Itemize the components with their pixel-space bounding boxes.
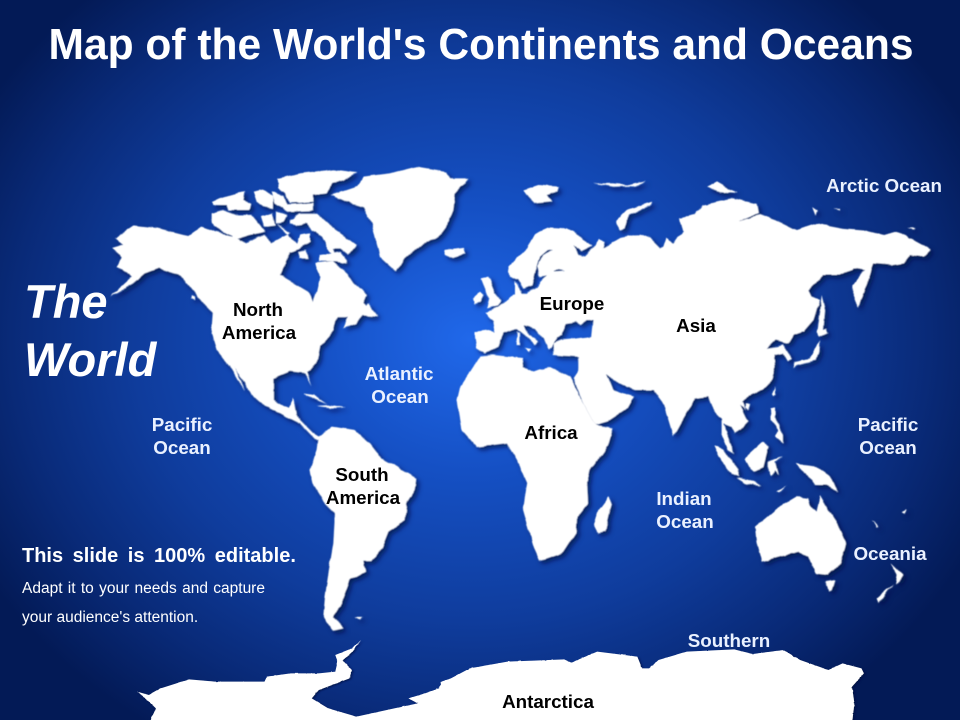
label: Atlantic Ocean: Atlantic [365,363,433,384]
landmass: Europe [473,227,630,353]
label: Pacific Ocean left: Ocean [153,437,211,458]
landmass: Oceania [755,495,907,603]
label: Pacific Ocean right: Pacific [858,414,918,435]
world map landmasses [110,167,930,631]
label: The World: The [24,275,108,328]
text block: editable note: Adapt it to your needs and capture [22,580,265,597]
label: Indian Ocean: Ocean [656,511,714,532]
label: South America [326,464,401,508]
label: Pacific Ocean right: Ocean [859,437,917,458]
label: The World [24,275,158,386]
label: The World: World [24,333,158,386]
label: Oceania: Oceania [853,543,927,564]
landmass: Africa and Madagascar [457,355,613,561]
landmass: Asia [523,181,930,453]
label: North America [222,299,297,343]
label: Pacific Ocean right [858,414,918,458]
label: Antarctica: Antarctica [502,691,594,712]
label: Arctic Ocean: Arctic Ocean [826,175,942,196]
landmass: Antarctica [137,640,864,720]
label: Africa: Africa [524,422,578,443]
text block: editable note: This slide is 100% editable. [22,545,296,567]
landmass: South America [310,427,417,631]
label: Indian Ocean: Indian [656,488,712,509]
text block: editable note [22,545,296,626]
label: Pacific Ocean left: Pacific [152,414,212,435]
label: South America: South [335,464,389,485]
label: North America: North [233,299,283,320]
label: North America: America [222,322,297,343]
title: Map of the World's Continents and Oceans [48,20,914,69]
label: Atlantic Ocean: Ocean [371,386,429,407]
label: Indian Ocean [656,488,714,532]
landmass: Greenland and Iceland [332,167,468,272]
landmass: Japan and Southeast Asian islands [713,340,838,492]
text block: editable note: your audience's attention. [22,609,198,626]
label: Atlantic Ocean [365,363,433,407]
label: Asia: Asia [676,315,716,336]
label: Pacific Ocean left [152,414,212,458]
landmass: North America [110,169,377,441]
label: Europe: Europe [540,293,604,314]
label: South America: America [326,487,401,508]
label: Southern: Southern [688,630,770,651]
